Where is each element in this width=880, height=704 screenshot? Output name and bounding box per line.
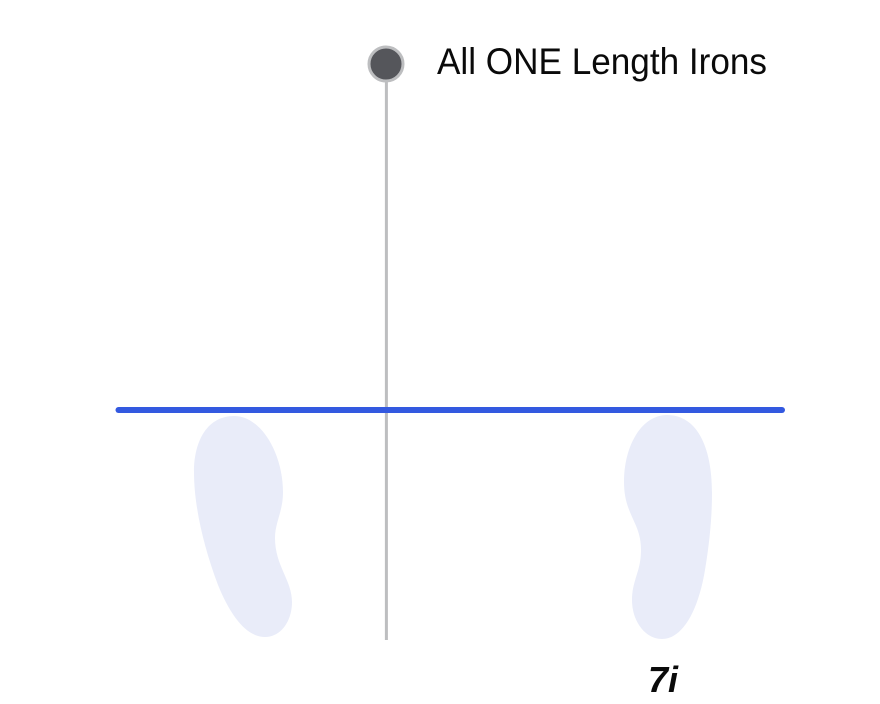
icon: club head marker bbox=[369, 47, 403, 81]
label: 7i: 7i bbox=[648, 659, 679, 700]
icon: right foot bbox=[624, 415, 712, 639]
vertical shaft line bbox=[385, 64, 388, 640]
title: all one length irons: All ONE Length Irons bbox=[437, 41, 767, 82]
icon: left foot bbox=[194, 416, 292, 637]
horizontal target line bbox=[118, 407, 782, 413]
